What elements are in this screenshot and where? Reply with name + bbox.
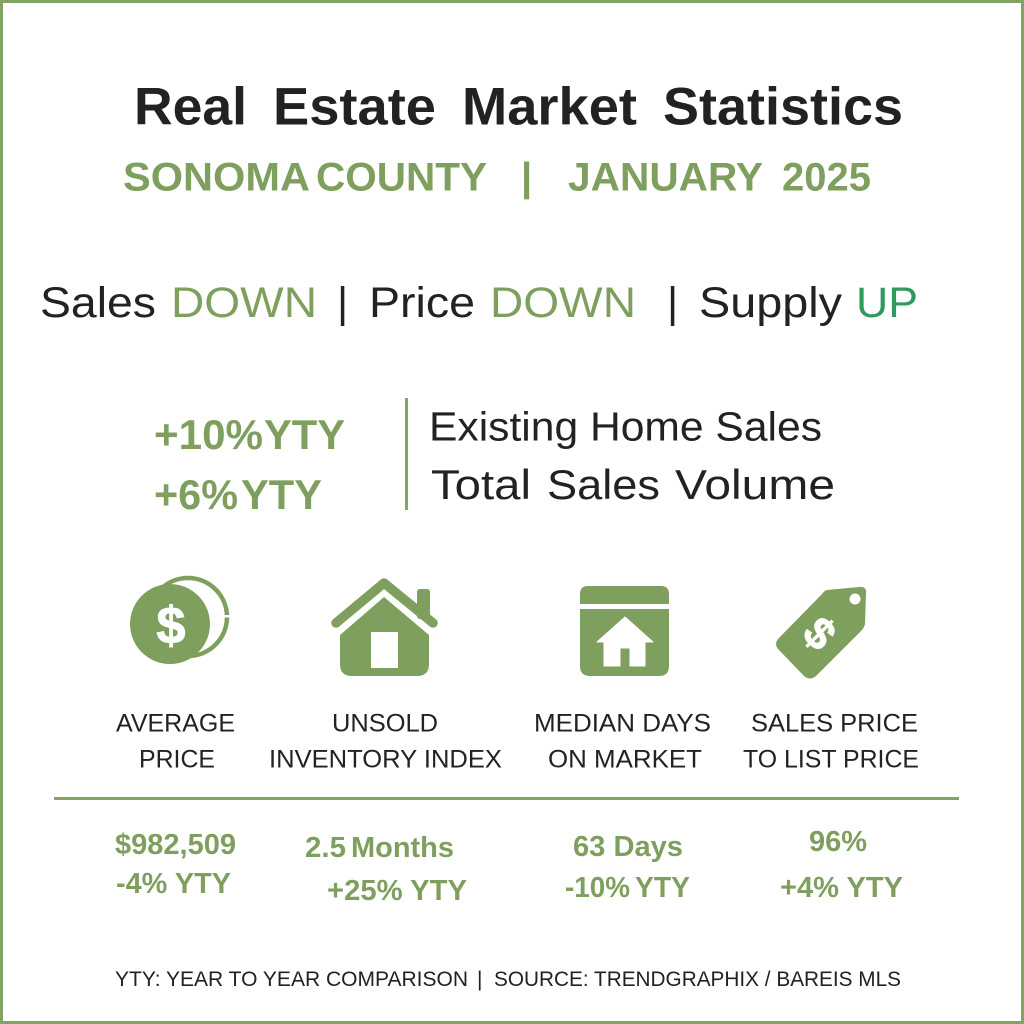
market summary line: Supply	[699, 279, 843, 327]
metric labels: UNSOLD	[332, 710, 438, 738]
metric: sales to list: +4% YTY	[780, 872, 903, 904]
icon: coins	[130, 578, 232, 664]
metric labels: ON MARKET	[548, 746, 702, 774]
year-to-year sales changes: +10%	[154, 411, 263, 458]
metric labels: MEDIAN DAYS	[534, 710, 711, 738]
icon: calendar with house	[580, 586, 669, 676]
metric: days on market: 63 Days	[573, 831, 683, 863]
title	[134, 78, 903, 136]
title: Market	[462, 78, 637, 136]
metric: unsold inventory: +25% YTY	[327, 875, 467, 907]
subtitle: SONOMA	[123, 156, 310, 200]
icon: house	[336, 583, 433, 676]
year-to-year sales changes: YTY	[264, 411, 345, 458]
title: Estate	[273, 78, 436, 136]
icon: price tag	[776, 587, 866, 678]
market summary line: DOWN	[171, 279, 317, 327]
metric: sales to list	[780, 826, 903, 904]
vertical divider	[405, 398, 408, 510]
metric labels	[116, 710, 919, 774]
market summary line: DOWN	[490, 279, 636, 327]
market summary line: UP	[856, 279, 918, 327]
subtitle: JANUARY	[568, 156, 763, 200]
metric: average price: $982,509	[115, 829, 236, 861]
title: Real	[134, 78, 247, 136]
metric: unsold inventory: Months	[351, 832, 454, 864]
market summary line	[40, 279, 918, 327]
market summary line: Price	[369, 279, 475, 327]
horizontal divider	[54, 797, 959, 800]
metric: days on market	[565, 831, 690, 904]
sales labels: Volume	[675, 461, 835, 508]
metric: days on market: -10%	[565, 872, 630, 904]
subtitle: COUNTY	[316, 156, 487, 200]
metric: average price	[115, 829, 236, 900]
metric labels: PRICE	[139, 746, 215, 774]
icon: price tag: $	[793, 608, 845, 660]
market summary line: |	[337, 279, 348, 327]
metric: days on market: YTY	[635, 872, 690, 904]
footnote: SOURCE: TRENDGRAPHIX / BAREIS MLS	[494, 968, 901, 991]
footnote: YTY: YEAR TO YEAR COMPARISON	[115, 968, 468, 991]
market summary line: Sales	[40, 279, 156, 327]
metric: sales to list: 96%	[809, 826, 867, 858]
title: Statistics	[663, 78, 903, 136]
sales labels: Total	[431, 461, 531, 508]
metric: unsold inventory: 2.5	[305, 832, 346, 864]
subtitle: 2025	[782, 156, 871, 200]
metric: unsold inventory	[305, 832, 467, 907]
year-to-year sales changes	[154, 411, 345, 518]
sales labels: Existing Home Sales	[429, 404, 822, 450]
metric labels: AVERAGE	[116, 710, 235, 738]
year-to-year sales changes: +6%	[154, 471, 238, 518]
sales labels: Sales	[547, 461, 660, 508]
market summary line: |	[667, 279, 678, 327]
icon: coins: $	[157, 597, 186, 655]
metric labels: SALES PRICE	[751, 710, 918, 738]
metric labels: TO LIST PRICE	[743, 746, 919, 774]
metric labels: INVENTORY INDEX	[269, 746, 502, 774]
sales labels	[429, 404, 835, 508]
year-to-year sales changes: YTY	[241, 471, 322, 518]
footnote	[115, 968, 901, 991]
subtitle: |	[521, 156, 532, 200]
footnote: |	[477, 968, 482, 991]
metric: average price: -4% YTY	[116, 868, 231, 900]
subtitle	[123, 156, 871, 200]
